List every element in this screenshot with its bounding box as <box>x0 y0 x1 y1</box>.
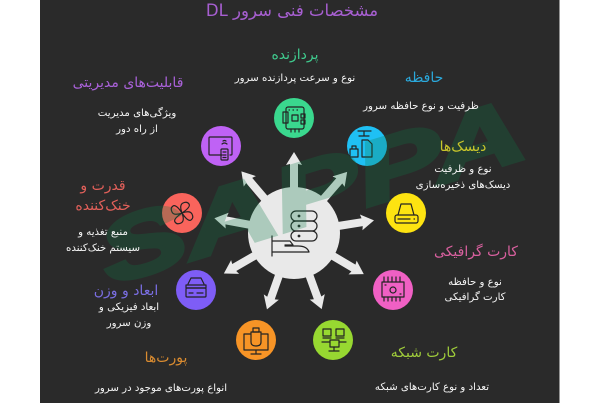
block: network card: تعداد و نوع کارت‌های شبکه <box>375 382 489 393</box>
icon circle: power and cooling <box>162 193 202 233</box>
block: ports: پورت‌ها <box>145 350 187 366</box>
block: power and cooling: قدرت و <box>79 178 126 194</box>
block: power and cooling: سیستم خنک‌کننده <box>66 243 140 254</box>
block: dimensions and weight: وزن سرور <box>106 318 151 329</box>
icon circle: processor <box>274 98 314 138</box>
block: disks: دیسک‌های ذخیره‌سازی <box>416 180 510 191</box>
block: dimensions and weight: ابعاد فیزیکی و <box>98 302 159 313</box>
block: memory: حافظه <box>405 70 443 86</box>
block: dimensions and weight: ابعاد و وزن <box>94 283 158 299</box>
icon: server on hand <box>272 211 317 256</box>
block: graphics card: نوع و حافظه <box>448 277 502 288</box>
block: power and cooling: خنک‌کننده <box>75 198 131 214</box>
icon circle: management <box>201 126 241 166</box>
title: مشخصات فنی سرور DL <box>206 1 378 21</box>
block: disks: دیسک‌ها <box>440 139 486 155</box>
icon circle: ports <box>236 320 276 360</box>
block: memory: ظرفیت و نوع حافظه سرور <box>362 101 479 112</box>
block: processor <box>234 47 355 84</box>
block: management: قابلیت‌های مدیریتی <box>73 75 183 91</box>
arrows radiating from centre <box>213 152 375 312</box>
block: disks: نوع و ظرفیت <box>434 164 492 175</box>
block: ports: انواع پورت‌های موجود در سرور <box>94 383 227 394</box>
icon circle: memory <box>347 126 387 166</box>
block: dimensions and weight <box>94 283 159 329</box>
block: graphics card: کارت گرافیکی <box>444 290 506 303</box>
block: memory <box>362 70 479 112</box>
block: disks <box>416 139 510 191</box>
block: ports <box>94 350 227 394</box>
block: management: از راه دور <box>115 124 158 135</box>
block: management <box>73 75 183 135</box>
icon circle: network <box>313 320 353 360</box>
block: power and cooling: منبع تغذیه و <box>77 227 128 238</box>
block: network card: کارت شبکه <box>391 345 458 361</box>
block: network card <box>375 345 489 393</box>
icon circle: graphics card <box>373 270 413 310</box>
block: graphics card <box>434 243 518 303</box>
block: processor: نوع و سرعت پردازنده سرور <box>234 73 355 84</box>
watermark: SAPPA <box>87 80 536 303</box>
central circle <box>248 187 340 279</box>
block: management: ویژگی‌های مدیریت <box>98 106 176 119</box>
block: processor: پردازنده <box>271 47 319 63</box>
icon circle: disks <box>386 193 426 233</box>
block: power and cooling <box>66 178 140 254</box>
icon circle: dimensions and weight <box>176 270 216 310</box>
block: graphics card: کارت گرافیکی <box>434 243 518 260</box>
